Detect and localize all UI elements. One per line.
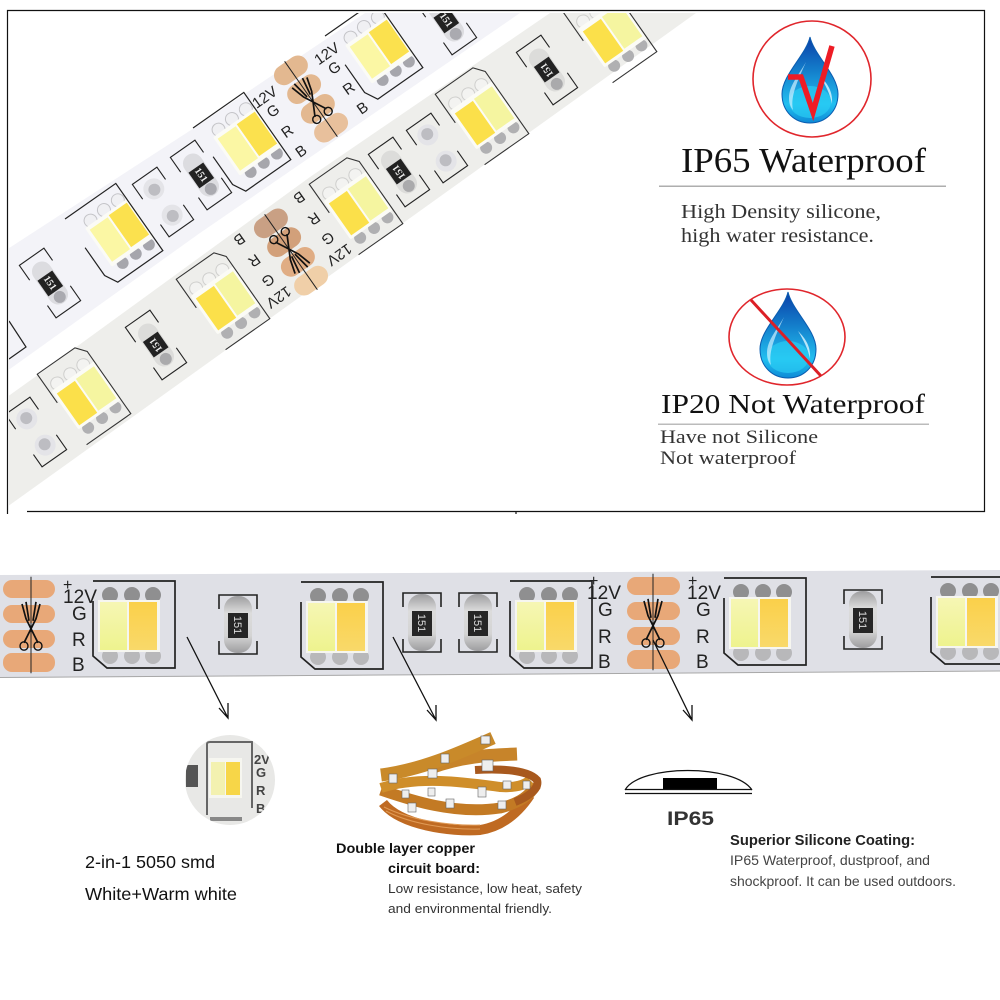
resistor xyxy=(219,595,257,654)
text block: copper circuit board: circuit board: xyxy=(388,861,480,876)
cut mark: left end xyxy=(3,577,97,676)
cut mark: G xyxy=(325,58,344,79)
cut mark: middle: + xyxy=(688,573,697,590)
resistor: 151 xyxy=(41,274,58,293)
text block: LED type xyxy=(85,852,237,904)
cut mark: G xyxy=(264,101,283,122)
resistor: 151 xyxy=(148,335,165,354)
cut mark: 12V xyxy=(311,39,343,69)
cut mark: B xyxy=(290,187,308,207)
LED chip xyxy=(37,343,131,445)
cut mark: 12V xyxy=(249,83,281,112)
text block: IP65 description: High Density silicone, xyxy=(681,202,881,223)
cut mark: B xyxy=(292,142,310,161)
heading: IP65 Waterproof: IP65 Waterproof xyxy=(681,141,926,180)
empty solder pads xyxy=(406,113,468,183)
text block: IP65 description: high water resistance. xyxy=(681,226,874,247)
text block: silicone coating: IP65 Waterproof, dustproof, and xyxy=(730,852,930,868)
cut mark: middle: G xyxy=(598,600,613,621)
resistor xyxy=(19,248,81,318)
resistor xyxy=(422,13,478,56)
resistor: 151 xyxy=(231,616,243,634)
LED chip xyxy=(724,578,806,665)
LED chip xyxy=(301,582,383,669)
panel: waterproof comparison frame xyxy=(0,0,984,514)
LED chip xyxy=(435,63,529,165)
LED chip xyxy=(93,581,175,668)
cut mark xyxy=(252,42,368,158)
LED chip xyxy=(563,13,658,84)
resistor xyxy=(844,590,882,649)
text block: IP20 description xyxy=(660,428,818,469)
cut mark: middle: B xyxy=(598,652,611,673)
resistor: 151 xyxy=(539,60,556,79)
text block: IP20 description: Have not Silicone xyxy=(660,428,818,448)
icon: silicone dome cross-section xyxy=(625,770,752,794)
cut mark xyxy=(234,191,352,310)
partial LED outline at left edge xyxy=(9,321,26,359)
LED chip xyxy=(324,13,424,100)
LED chip xyxy=(193,92,292,195)
cut mark: R xyxy=(304,208,323,228)
resistor xyxy=(403,593,441,652)
icon: IP20 drop with strike xyxy=(729,289,845,385)
cut mark: left end: B xyxy=(72,655,85,676)
LED chip xyxy=(510,581,592,668)
text block: silicone coating xyxy=(730,833,956,889)
icon: LED close-up thumbnail: B xyxy=(256,801,265,816)
LED chip xyxy=(931,577,1000,664)
cut mark: G xyxy=(318,228,337,248)
LED chip xyxy=(65,183,164,286)
arrow: to copper board xyxy=(393,637,436,720)
cut mark: 12V xyxy=(263,282,294,311)
resistor: 151 xyxy=(471,614,483,632)
cut mark: left end: 12V xyxy=(63,587,97,608)
text block: copper circuit board xyxy=(336,841,583,916)
cut mark: left end: R xyxy=(72,630,86,651)
icon: IP65 waterproof drop with check xyxy=(753,21,871,137)
LED chip xyxy=(176,248,270,350)
cut mark: B xyxy=(354,99,372,118)
resistor xyxy=(516,35,578,105)
icon: LED close-up thumbnail: R xyxy=(256,783,266,798)
resistor: 151 xyxy=(415,614,427,632)
resistor: 151 xyxy=(856,611,868,629)
icon: coiled copper LED strip xyxy=(381,736,537,830)
resistor xyxy=(170,140,232,210)
cut mark: middle: + xyxy=(589,573,598,590)
cut mark: 12V xyxy=(323,240,355,269)
cut mark: middle: B xyxy=(696,652,709,673)
cut mark: B xyxy=(230,229,248,249)
label: IP65: IP65 xyxy=(667,808,714,830)
resistor: 151 xyxy=(437,11,454,30)
cut mark: R xyxy=(245,250,263,270)
cut mark: G xyxy=(258,270,277,290)
icon: LED close-up thumbnail: G xyxy=(256,765,266,780)
resistor xyxy=(125,310,187,380)
text block: copper circuit board: Double layer copper xyxy=(336,841,476,856)
text block: copper circuit board: and environmental friendly. xyxy=(388,901,552,916)
resistor xyxy=(368,137,430,207)
text block: silicone coating: Superior Silicone Coating: xyxy=(730,833,915,849)
diagonal LED strip: IP20 bare xyxy=(0,0,696,512)
LED chip xyxy=(309,153,403,255)
icon: LED close-up thumbnail: 2V xyxy=(254,752,270,767)
icon: LED close-up thumbnail xyxy=(185,735,275,825)
arrow: to LED detail xyxy=(187,637,228,718)
cut mark: middle xyxy=(587,573,721,673)
cut mark: middle: 12V xyxy=(587,583,621,604)
heading: IP20 Not Waterproof: IP20 Not Waterproof xyxy=(661,389,925,419)
cut mark: middle: 12V xyxy=(687,583,721,604)
text block: IP65 description xyxy=(681,202,881,247)
divider under IP20 heading xyxy=(658,424,929,425)
cut mark: middle: R xyxy=(696,627,710,648)
cut mark: left end: + xyxy=(63,577,72,594)
cut mark: R xyxy=(278,122,297,142)
empty solder pads xyxy=(5,397,67,467)
text block: IP20 description: Not waterproof xyxy=(660,449,797,469)
cut mark: middle: G xyxy=(696,600,711,621)
cut mark: middle: R xyxy=(598,627,612,648)
text block: copper circuit board: Low resistance, low heat, safety xyxy=(388,881,583,896)
cut mark: left end: G xyxy=(72,604,87,625)
text block: LED type: White+Warm white xyxy=(85,884,237,904)
text block: silicone coating: shockproof. It can be used outdoors. xyxy=(730,873,956,889)
arrow: to silicone coating xyxy=(653,640,692,720)
resistor xyxy=(459,593,497,652)
cut mark: R xyxy=(340,79,358,99)
panel: horizontal LED strip xyxy=(0,570,1000,678)
divider under IP65 heading xyxy=(659,186,946,187)
empty solder pads xyxy=(132,167,194,237)
resistor: 151 xyxy=(192,166,209,185)
diagonal LED strip: IP65 silicone xyxy=(0,0,520,376)
text block: LED type: 2-in-1 5050 smd xyxy=(85,852,215,872)
resistor: 151 xyxy=(391,162,408,181)
